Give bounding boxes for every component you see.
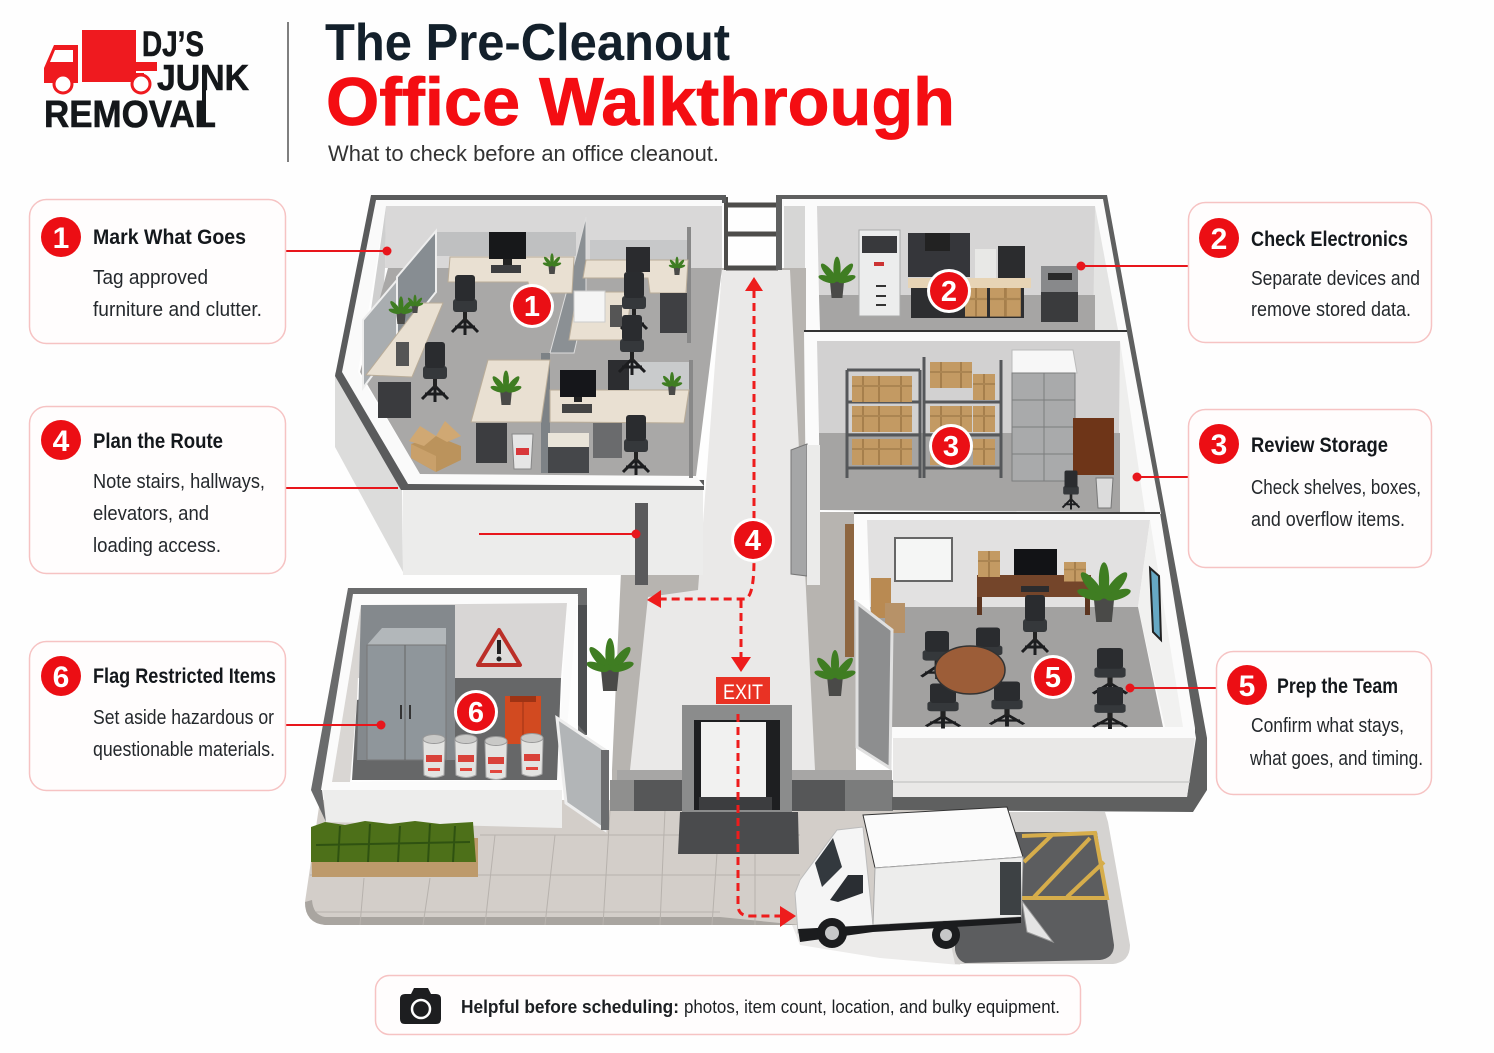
truck chassis and wheels	[798, 917, 1021, 942]
truck ground shadow	[790, 920, 960, 965]
body	[1251, 477, 1421, 531]
room 1 back wall	[385, 206, 722, 268]
panel: right building shell	[776, 195, 1207, 812]
chemical cans	[423, 734, 543, 780]
cardboard box	[409, 421, 461, 472]
body: Note stairs, hallways,	[93, 471, 265, 493]
heading: Review Storage	[1251, 434, 1388, 457]
desks	[366, 257, 689, 423]
floor plan illustration	[305, 195, 1207, 965]
title: The Pre-Cleanout	[325, 14, 730, 72]
room 5 front wall	[893, 738, 1195, 797]
body: loading access.	[93, 535, 221, 557]
badge 2: 2	[1211, 223, 1227, 256]
badge 6: 6	[53, 661, 69, 694]
badge 4	[41, 420, 81, 460]
room 2 floor	[819, 295, 1095, 330]
corridor plant	[813, 650, 857, 696]
room 3 floor	[819, 433, 1120, 512]
marker 1	[510, 284, 554, 328]
panel: 5 prep the team	[1216, 652, 1432, 794]
stacked chairs	[1093, 648, 1127, 729]
gray lockers	[367, 628, 446, 760]
badge 6	[41, 656, 81, 696]
office equipment	[378, 232, 687, 473]
icon: warning triangle	[478, 630, 520, 665]
heading: Prep the Team	[1277, 675, 1398, 698]
meeting room door	[857, 603, 892, 768]
room 6 white caps	[321, 594, 578, 790]
office chairs	[422, 272, 649, 475]
room 1 white wall caps	[342, 200, 722, 486]
badge 2	[1199, 218, 1239, 258]
logo wordmark: DJ’S	[142, 25, 204, 64]
marker 5: 5	[1045, 662, 1061, 694]
panel: room 1 open office	[335, 195, 726, 585]
room 6 door	[557, 718, 608, 830]
plant	[1076, 562, 1132, 622]
partitions	[363, 217, 693, 478]
callout text: Helpful before scheduling:	[461, 997, 679, 1017]
panel: 6 flag restricted items	[30, 642, 286, 790]
filing cabinets	[1012, 350, 1077, 481]
room 5 floor	[870, 607, 1163, 727]
callout: helpful before scheduling	[376, 976, 1080, 1034]
body	[1251, 268, 1420, 321]
corridor back frame	[726, 197, 778, 270]
marker 2	[927, 269, 971, 313]
marker 3	[929, 424, 973, 468]
red jerry cans	[505, 696, 541, 744]
body: Tag approved	[93, 267, 208, 289]
room 6 floor	[352, 678, 561, 780]
marker 6	[454, 690, 498, 734]
corridor plant left	[585, 638, 635, 691]
icon: red truck	[44, 30, 157, 93]
badge 3: 3	[1211, 429, 1227, 462]
shelving with boxes	[847, 357, 1001, 478]
door mat	[678, 812, 799, 854]
room 6 side wall	[332, 605, 361, 782]
room 3 walls	[804, 332, 1161, 514]
body	[93, 267, 262, 321]
callout text: photos, item count, location, and bulky equipment.	[684, 997, 1060, 1017]
badge 3	[1199, 424, 1239, 464]
logo: DJ's Junk Removal	[44, 25, 249, 136]
shelf with printers	[908, 233, 1031, 318]
panel: room 5 meeting room	[845, 513, 1195, 797]
panel: 4 plan the route	[30, 406, 286, 574]
sidewalk	[305, 800, 1000, 925]
body: furniture and clutter.	[93, 299, 262, 321]
truck ramp	[1022, 901, 1053, 942]
body: questionable materials.	[93, 739, 275, 761]
route arrows	[647, 277, 796, 927]
panel: room 6 restricted items	[311, 588, 609, 830]
logo wordmark: JUNK	[157, 57, 249, 98]
planter with hedge	[311, 821, 478, 877]
corridor floor	[612, 268, 892, 810]
panel: 3 review storage	[1188, 410, 1432, 568]
wood cabinet	[1073, 418, 1114, 475]
marker 6: 6	[468, 697, 484, 729]
heading: Mark What Goes	[93, 226, 246, 249]
threshold band	[610, 770, 893, 811]
icon: camera	[400, 988, 441, 1024]
room 6 back wall	[350, 603, 567, 678]
truck	[795, 807, 1053, 949]
title	[325, 14, 955, 140]
pillar	[635, 503, 648, 585]
body	[93, 471, 265, 557]
badge 1	[41, 217, 81, 257]
marker 4	[731, 518, 775, 562]
body: Check shelves, boxes,	[1251, 477, 1421, 499]
body: Confirm what stays,	[1251, 715, 1404, 737]
plant	[818, 257, 856, 298]
room 5 walls	[854, 513, 1195, 738]
badge 5	[1227, 665, 1267, 705]
outer dark wall	[776, 195, 1207, 812]
chair and bin	[1063, 470, 1113, 510]
body: Set aside hazardous or	[93, 707, 274, 729]
desk plants	[388, 253, 686, 405]
corridor doors	[791, 444, 820, 585]
paper shredder	[1041, 266, 1078, 322]
heading: Plan the Route	[93, 430, 223, 453]
boxes by door	[845, 524, 905, 657]
leader lines	[286, 246, 1216, 730]
driveway	[950, 812, 1130, 964]
badge 4: 4	[53, 425, 70, 458]
body: Separate devices and	[1251, 268, 1420, 290]
marker 1: 1	[524, 291, 540, 323]
heading: Flag Restricted Items	[93, 665, 276, 688]
copier	[859, 230, 900, 316]
body	[1249, 715, 1423, 770]
panel: room 3 storage	[804, 331, 1161, 514]
marker 5	[1031, 655, 1075, 699]
truck box	[863, 807, 1023, 868]
body: remove stored data.	[1251, 299, 1411, 321]
truck cab	[795, 827, 873, 933]
parking hazard stripes	[1022, 833, 1107, 898]
heading: Check Electronics	[1251, 228, 1408, 251]
room 6 front wall	[323, 790, 562, 828]
subtitle: What to check before an office cleanout.	[328, 141, 719, 166]
panel: 1 mark what goes	[30, 200, 286, 344]
body: and overflow items.	[1251, 509, 1405, 531]
exit doorway	[678, 705, 799, 854]
walkway	[630, 270, 815, 770]
badge 1: 1	[53, 222, 69, 255]
room 1 side wall	[362, 206, 386, 372]
logo wordmark: REMOVAL	[44, 94, 216, 136]
desk chair	[1022, 595, 1048, 655]
whiteboard	[895, 538, 952, 581]
panel: room 2 electronics	[782, 199, 1127, 332]
exit sign: EXIT	[723, 681, 763, 704]
wall art	[1150, 568, 1161, 640]
badge 5: 5	[1239, 670, 1255, 703]
meeting table with chairs	[921, 628, 1024, 728]
room 6 outer wall	[311, 588, 587, 822]
step markers	[454, 269, 1075, 734]
body	[93, 707, 275, 761]
marker 4: 4	[745, 525, 761, 557]
room 2 walls	[782, 199, 1127, 332]
locker recess	[357, 605, 455, 760]
body: elevators, and	[93, 503, 209, 525]
room 1 exterior walls	[335, 372, 403, 572]
title: Office Walkthrough	[326, 64, 955, 140]
desk with monitor	[977, 549, 1091, 615]
room 1 floor	[360, 268, 722, 476]
marker 3: 3	[943, 431, 959, 463]
panel: 2 check electronics	[1188, 202, 1432, 342]
marker 2: 2	[941, 276, 957, 308]
body: what goes, and timing.	[1249, 748, 1423, 770]
logo wordmark	[44, 25, 249, 136]
